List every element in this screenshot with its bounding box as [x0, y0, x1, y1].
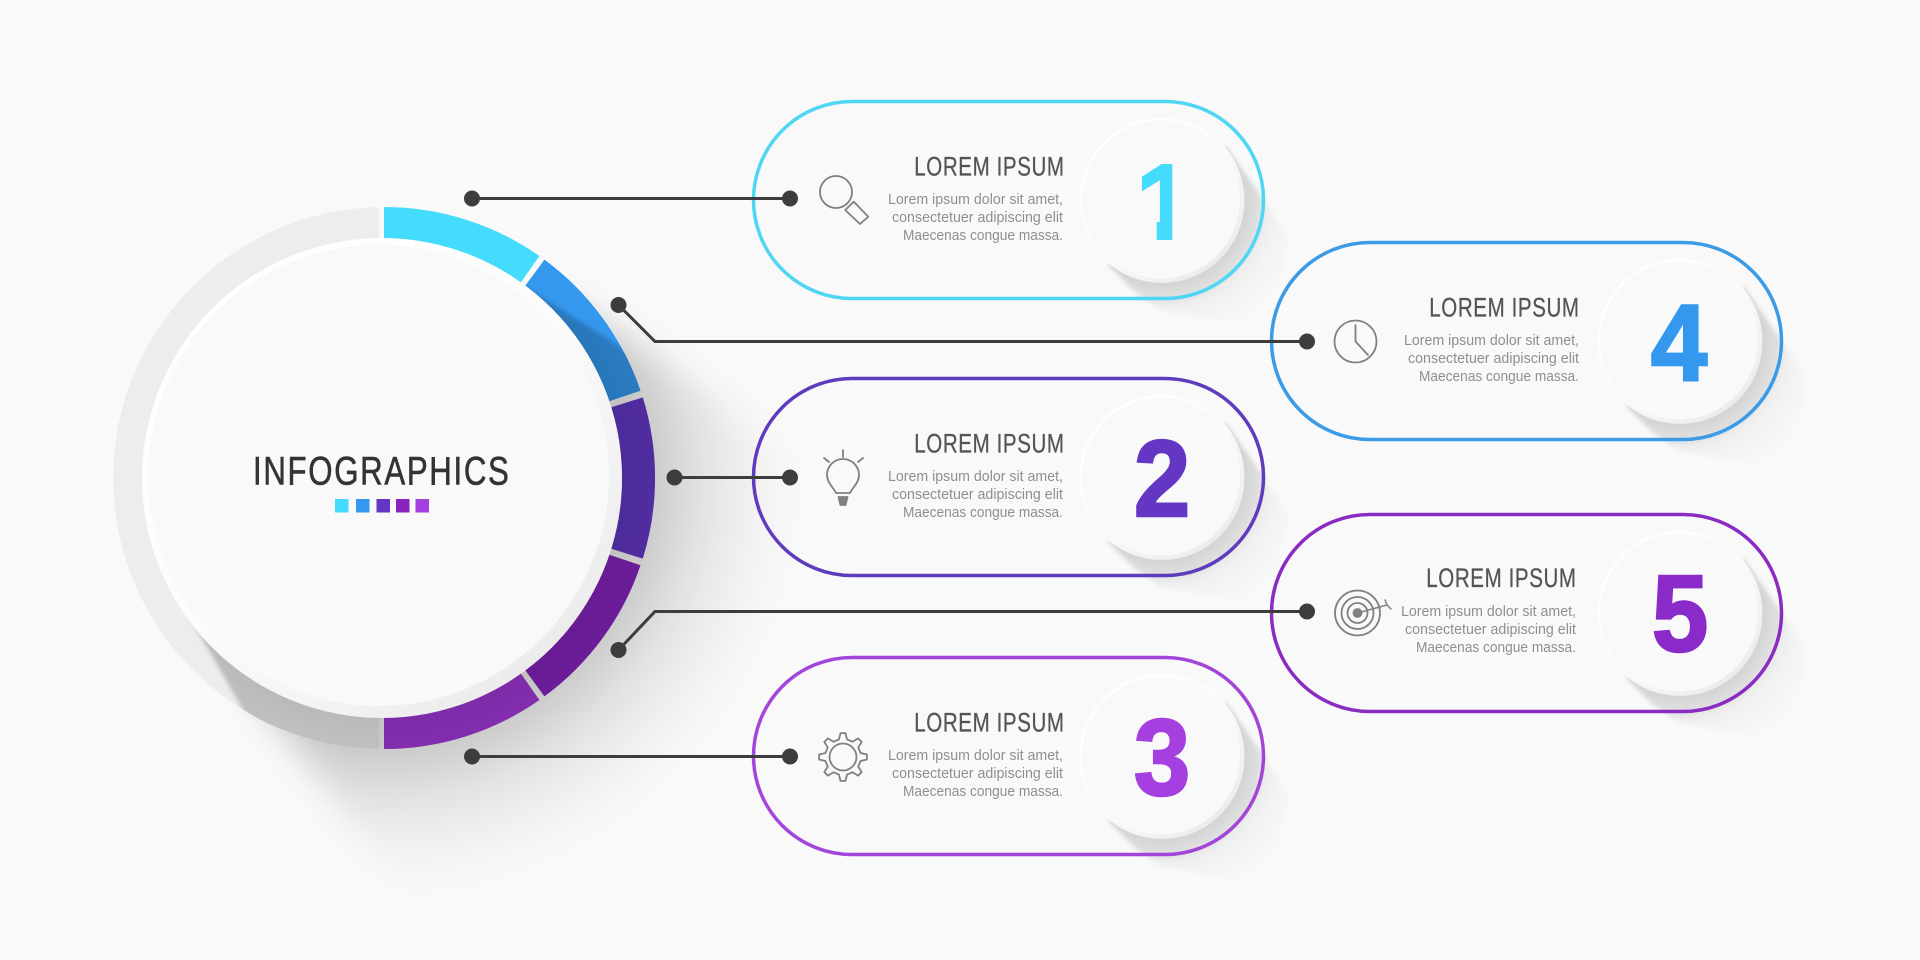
- connector 2: [666, 470, 798, 486]
- ring segment 5: violet: [525, 555, 640, 696]
- disc shadow over the ring: [192, 286, 656, 750]
- card 4 number: 4: [1651, 283, 1707, 404]
- card 5 heading: LOREM IPSUM: [1426, 563, 1576, 594]
- card 3 body text: Lorem ipsum dolor sit amet,: [888, 747, 1063, 764]
- icon: magnifying glass: [820, 176, 868, 224]
- card 2 circle: [1080, 395, 1244, 560]
- card 4 heading: LOREM IPSUM: [1429, 293, 1579, 323]
- card 1 body text: Maecenas congue massa.: [903, 227, 1063, 244]
- card 2 body text: Maecenas congue massa.: [903, 504, 1063, 521]
- card 1 number: [1142, 164, 1172, 240]
- card 5 body text: Maecenas congue massa.: [1416, 639, 1576, 656]
- card 5 number: 5: [1652, 554, 1708, 675]
- card 4 circle: [1598, 259, 1762, 424]
- legend squares: [335, 499, 429, 512]
- connector 5: [610, 604, 1315, 658]
- card 1 circle: [1080, 118, 1244, 283]
- card 3 body text: consectetuer adipiscing elit: [892, 765, 1064, 782]
- card 3 number: 3: [1134, 698, 1190, 819]
- card 2 number: 2: [1134, 419, 1190, 540]
- central disc: [142, 238, 622, 718]
- icon: gear: [819, 733, 867, 781]
- card 3: [754, 658, 1290, 886]
- card 1 outline: [754, 102, 1264, 298]
- card 2: [754, 378, 1290, 607]
- card 1 heading: LOREM IPSUM: [914, 152, 1064, 182]
- icon: target with arrow: [1335, 590, 1391, 636]
- connector 1: [464, 190, 798, 206]
- card 3 circle shadow: [1108, 702, 1290, 886]
- card 2 body text: consectetuer adipiscing elit: [892, 486, 1064, 503]
- card 4 circle shadow: [1626, 287, 1808, 471]
- card 3 body text: Maecenas congue massa.: [903, 783, 1063, 800]
- card 4 outline: [1272, 242, 1782, 440]
- card 3 heading: LOREM IPSUM: [914, 708, 1064, 738]
- card 5 circle: [1598, 531, 1762, 696]
- card 4 body text: [1404, 332, 1580, 385]
- card 5 outline: [1272, 514, 1782, 712]
- icon: light bulb: [824, 450, 863, 505]
- card 2 body text: [888, 468, 1064, 521]
- ring segment 1: cyan: [384, 207, 539, 283]
- card 1: [752, 100, 1272, 310]
- card 1 number: 1: [1136, 142, 1196, 264]
- connector 3: [464, 748, 798, 764]
- card 1 circle shadow: [1108, 146, 1290, 330]
- card 2 circle shadow: [1108, 423, 1290, 607]
- icon: clock: [1334, 320, 1376, 362]
- card 4 body text: Maecenas congue massa.: [1419, 368, 1579, 385]
- card 5: [1272, 514, 1808, 743]
- card 4 body text: consectetuer adipiscing elit: [1408, 350, 1580, 367]
- disc shadow on the background: [252, 299, 752, 848]
- connector 4: [610, 297, 1315, 350]
- panel: segmented ring: [113, 207, 655, 749]
- ring segment 4: blue: [525, 260, 640, 401]
- card 1 body text: consectetuer adipiscing elit: [892, 209, 1064, 226]
- card 3 body text: [888, 747, 1064, 800]
- card 2 body text: Lorem ipsum dolor sit amet,: [888, 468, 1063, 485]
- ring track: grey half: [113, 207, 379, 749]
- title: INFOGRAPHICS: [253, 449, 509, 493]
- card 5 body text: consectetuer adipiscing elit: [1405, 621, 1577, 638]
- disc base: [142, 238, 622, 718]
- card 4 body text: Lorem ipsum dolor sit amet,: [1404, 332, 1579, 349]
- card 3 circle: [1080, 674, 1244, 839]
- card 1 body text: [888, 191, 1064, 244]
- card 1 body text: Lorem ipsum dolor sit amet,: [888, 191, 1063, 208]
- card 2 outline: [754, 378, 1264, 576]
- disc face: [148, 245, 609, 706]
- card 5 circle shadow: [1626, 559, 1808, 743]
- card 5 body text: [1401, 603, 1577, 656]
- card 2 heading: LOREM IPSUM: [914, 429, 1064, 459]
- card 5 body text: Lorem ipsum dolor sit amet,: [1401, 603, 1576, 620]
- card 3 outline: [754, 658, 1264, 854]
- card 4: [1272, 242, 1808, 471]
- ring segment 2: indigo: [611, 397, 655, 559]
- ring segment 3: purple: [384, 673, 539, 749]
